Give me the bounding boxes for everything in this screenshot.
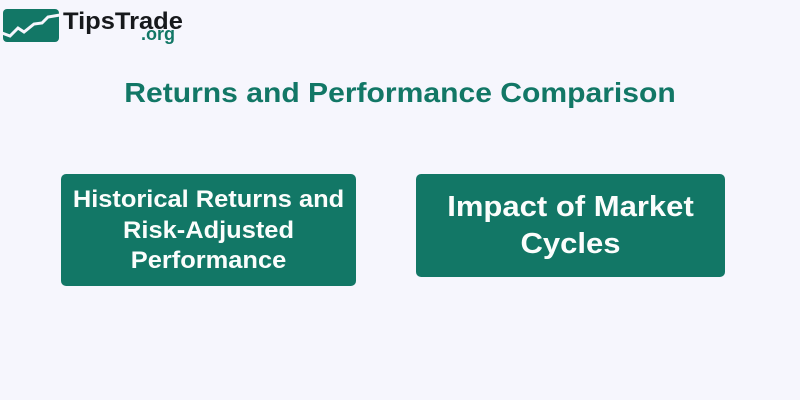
logo suffix: .org [141,24,175,44]
panel text: line 2: Cycles [520,228,621,260]
panel text: line 1: Impact of Market [447,191,694,223]
panel: historical returns [61,174,356,286]
icon: rising chart line [3,9,59,42]
logo wordmark: TipsTrade [63,8,183,35]
logo [3,8,183,44]
title: Returns and Performance Comparison [124,77,676,108]
panel text: line 1: Historical Returns and [73,186,344,213]
panel text: line 2: Risk-Adjusted [123,217,294,244]
panel text: line 3: Performance [131,247,286,274]
panel: market cycles [416,174,725,277]
